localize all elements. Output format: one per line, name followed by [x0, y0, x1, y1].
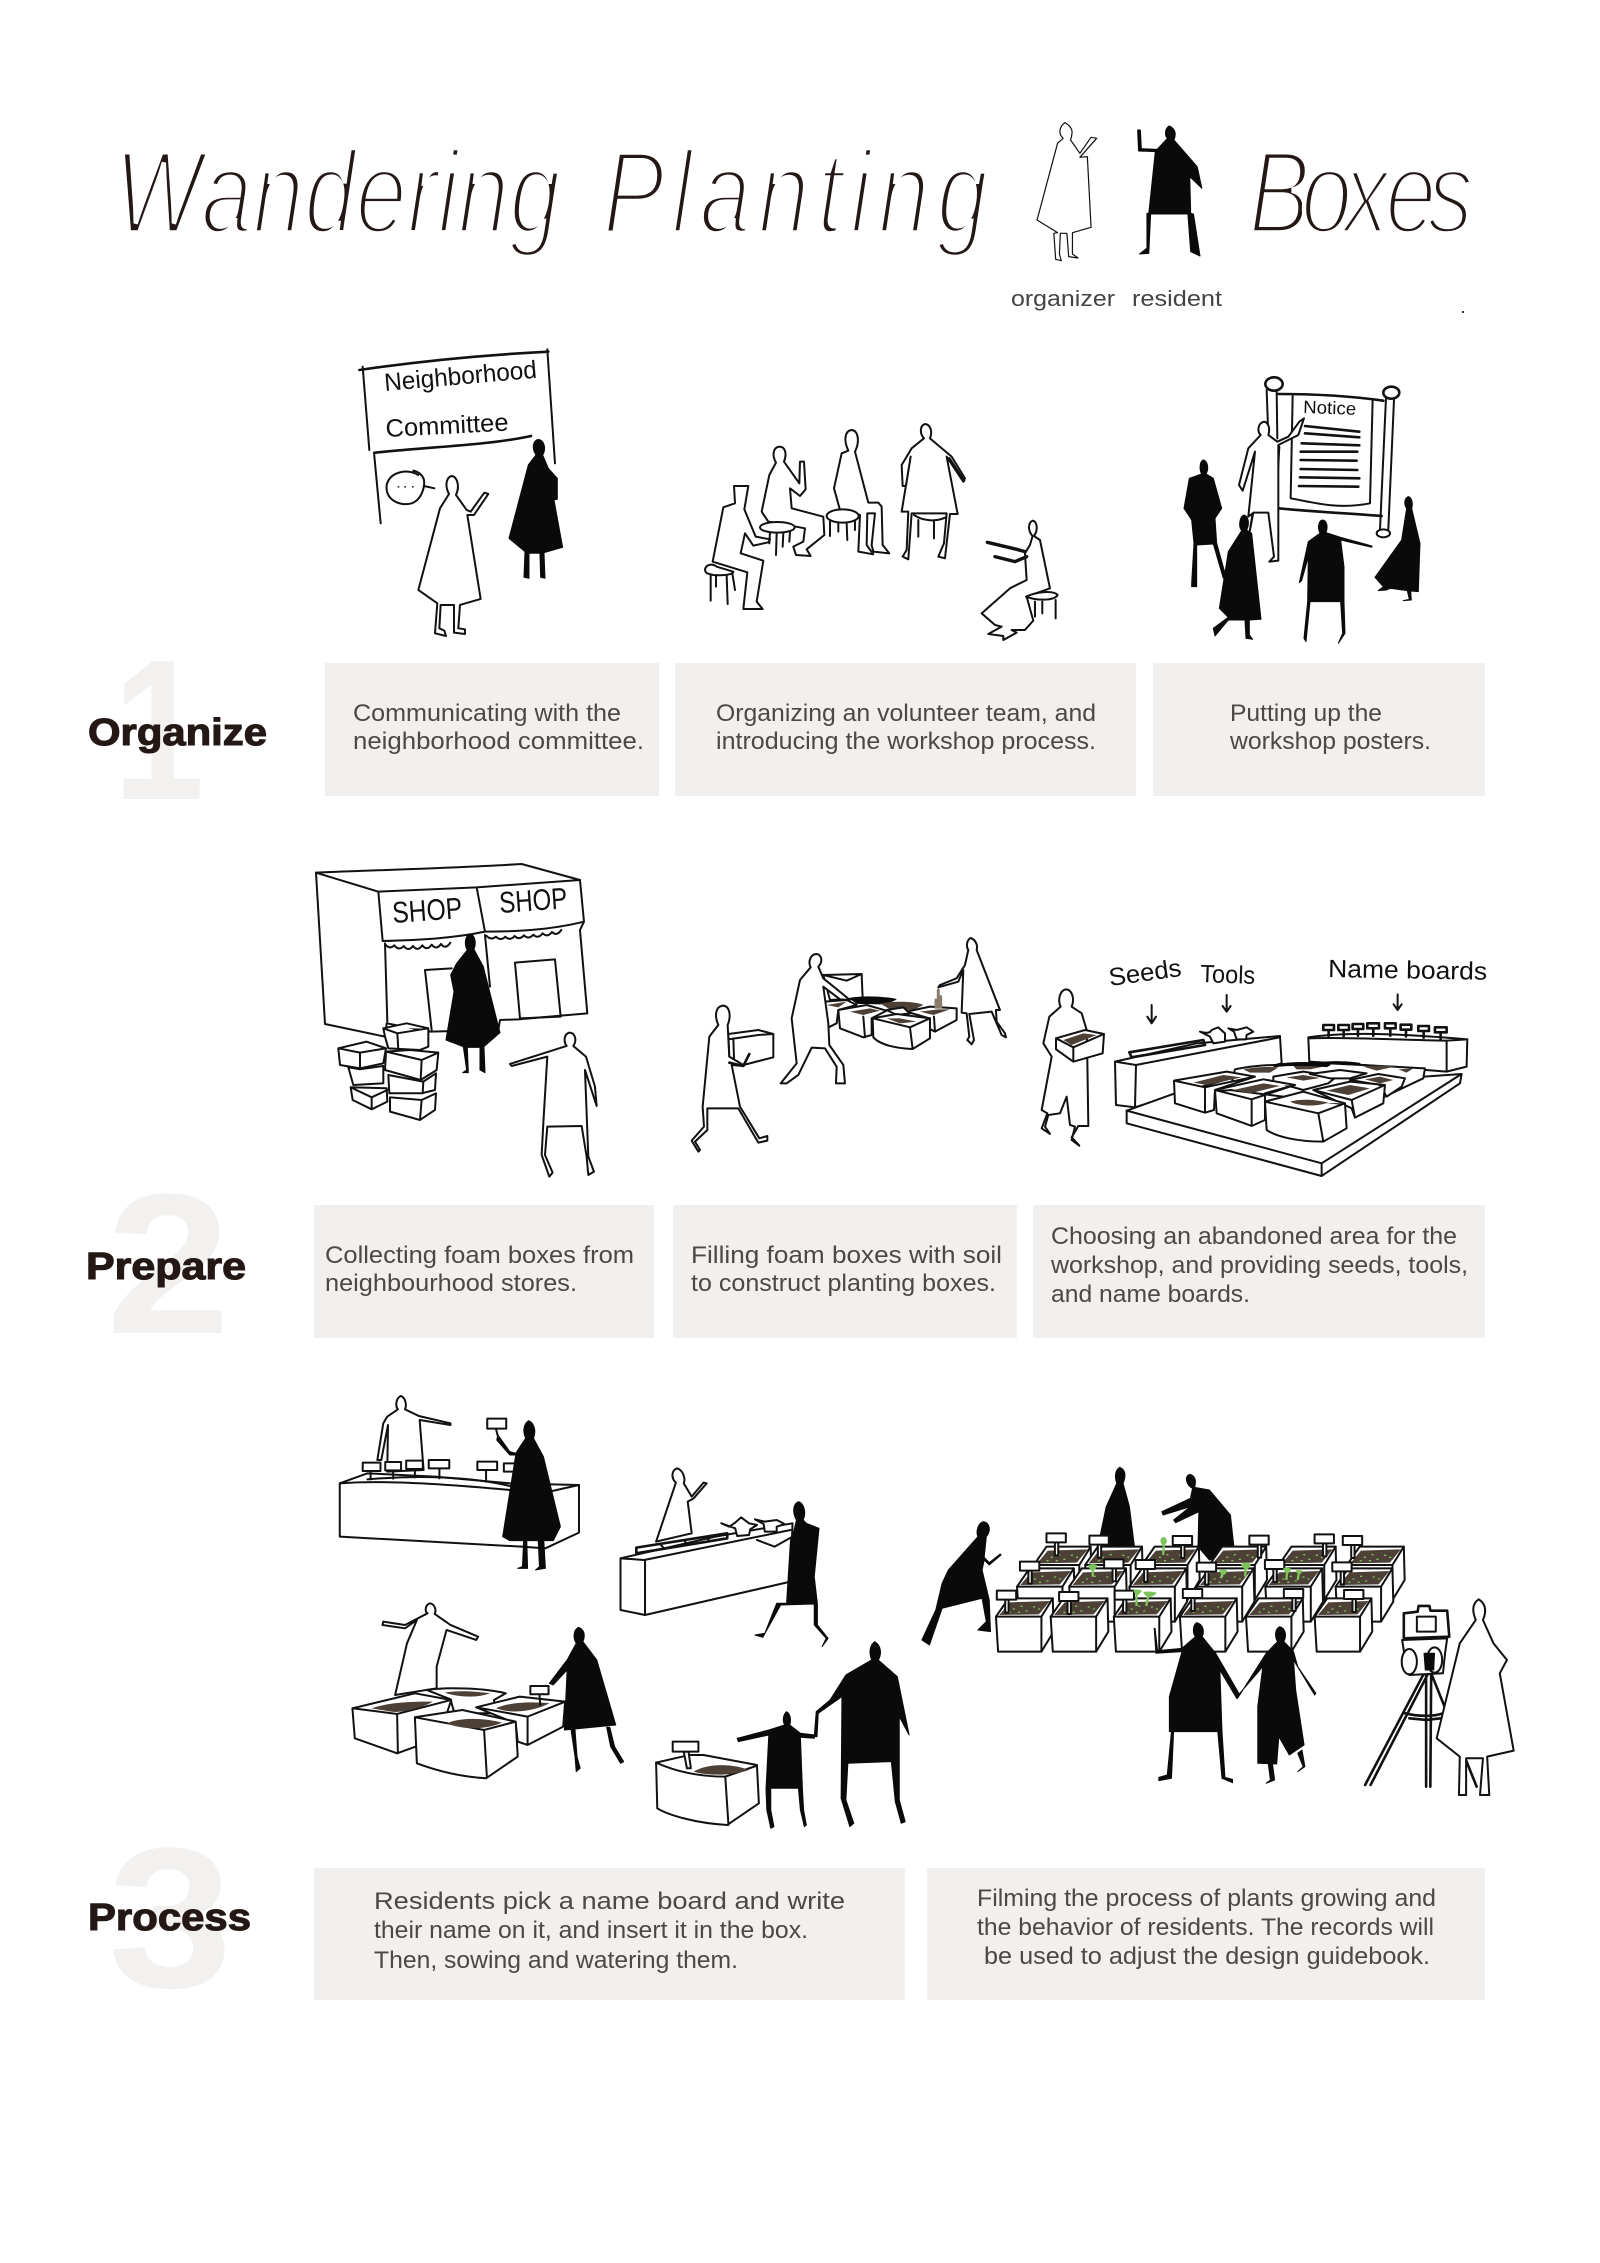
panel: volunteer team [675, 663, 1136, 796]
panel: choosing an area: Choosing an abandoned area for the [1051, 1223, 1457, 1250]
icon: resident figure [1138, 126, 1202, 256]
arrow: seeds [1147, 1005, 1156, 1023]
panel: choosing an area [1033, 1205, 1485, 1338]
scene: shop and foam boxes [316, 864, 597, 1177]
title word: Wandering: Wandering [115, 127, 561, 259]
handwriting: Notice: Notice [1303, 397, 1357, 419]
title word: Boxes: Boxes [1249, 127, 1473, 259]
panel: filling foam boxes: Filling foam boxes with soil [691, 1242, 1002, 1269]
panel: filling foam boxes [673, 1205, 1017, 1338]
panel: filming the process [927, 1868, 1485, 2000]
scene: workshop area with tables and boxes [1042, 989, 1467, 1176]
heading: Organize: Organize [88, 712, 267, 754]
back row of planting boxes [1034, 1533, 1405, 1600]
heading: Prepare: Prepare [86, 1246, 246, 1288]
step 1 row [88, 617, 1485, 842]
scene: volunteer team meeting [705, 424, 1058, 640]
panel: communicating: Communicating with the [353, 700, 621, 727]
scene: neighborhood committee [359, 349, 563, 636]
scene: camera on tripod and organizer filming [1365, 1599, 1514, 1795]
panel: posters [1153, 663, 1485, 796]
panel: residents pick name boards: Then, sowing and watering them. [374, 1947, 738, 1974]
panel: choosing an area: workshop, and providing seeds, tools, [1050, 1252, 1468, 1279]
step 2 row [86, 1152, 1485, 1375]
panel: filming the process: the behavior of residents. The records will [977, 1914, 1434, 1941]
large number 3: 3 [108, 1806, 233, 2029]
legend: organizer and resident figures [1037, 123, 1202, 261]
handwriting: Committee: Committee [385, 409, 509, 443]
front row of planting boxes [996, 1589, 1372, 1652]
panel: residents pick name boards [314, 1868, 905, 2000]
legend captions [1011, 286, 1222, 311]
panel: collecting foam boxes: Collecting foam boxes from [325, 1242, 634, 1269]
panel: volunteer team: introducing the workshop process. [716, 728, 1096, 755]
scene: picking seeds and tools [621, 1468, 828, 1647]
panel: filling foam boxes: to construct planting boxes. [691, 1270, 996, 1297]
label: Seeds: Seeds [1107, 954, 1183, 992]
panel: communicating: neighborhood committee. [353, 728, 644, 755]
handwriting: SHOP: SHOP [498, 882, 568, 920]
handwriting: SHOP: SHOP [391, 892, 463, 930]
arrow: name boards [1394, 994, 1402, 1010]
step 3 illustrations left [340, 1396, 909, 1828]
panel: residents pick name boards: Residents pick a name board and write [374, 1888, 845, 1915]
panel: volunteer team: Organizing an volunteer team, and [716, 700, 1096, 727]
scene: picking name boards [340, 1396, 579, 1570]
panel: posters: Putting up the [1230, 700, 1382, 727]
scene: residents and boxes with sprouts [922, 1467, 1405, 1783]
arrow: tools [1223, 995, 1231, 1012]
heading: Process: Process [88, 1897, 251, 1939]
large number 2: 2 [106, 1152, 231, 1375]
panel: collecting foam boxes [314, 1205, 654, 1338]
panel: filming the process: be used to adjust the design guidebook. [984, 1943, 1430, 1970]
middle row of planting boxes [1017, 1559, 1393, 1622]
scene: notice board and posters [1184, 377, 1420, 643]
scene: parent and child sowing [656, 1642, 909, 1828]
scene: soil boxes and sowing [352, 1603, 624, 1778]
title word: Planting: Planting [603, 127, 988, 259]
caption: resident: resident [1132, 286, 1222, 311]
large number 1: 1 [113, 617, 204, 842]
title [115, 127, 1473, 259]
panel: communicating [325, 663, 659, 796]
icon: organizer figure [1037, 123, 1097, 261]
label: Tools: Tools [1200, 960, 1256, 990]
panel: choosing an area: and name boards. [1051, 1281, 1250, 1308]
panel: residents pick name boards: their name on it, and insert it in the box. [374, 1917, 808, 1944]
step 3 row [88, 1806, 1485, 2029]
panel: filming the process: Filming the process of plants growing and [977, 1885, 1436, 1912]
scene: filling foam boxes [692, 938, 1006, 1152]
label: Name boards: Name boards [1328, 955, 1487, 986]
handwriting: Neighborhood: Neighborhood [383, 356, 538, 397]
panel: collecting foam boxes: neighbourhood stores. [325, 1270, 577, 1297]
step 3 illustrations right [922, 1467, 1514, 1795]
caption: organizer: organizer [1011, 286, 1115, 311]
panel: posters: workshop posters. [1229, 728, 1431, 755]
